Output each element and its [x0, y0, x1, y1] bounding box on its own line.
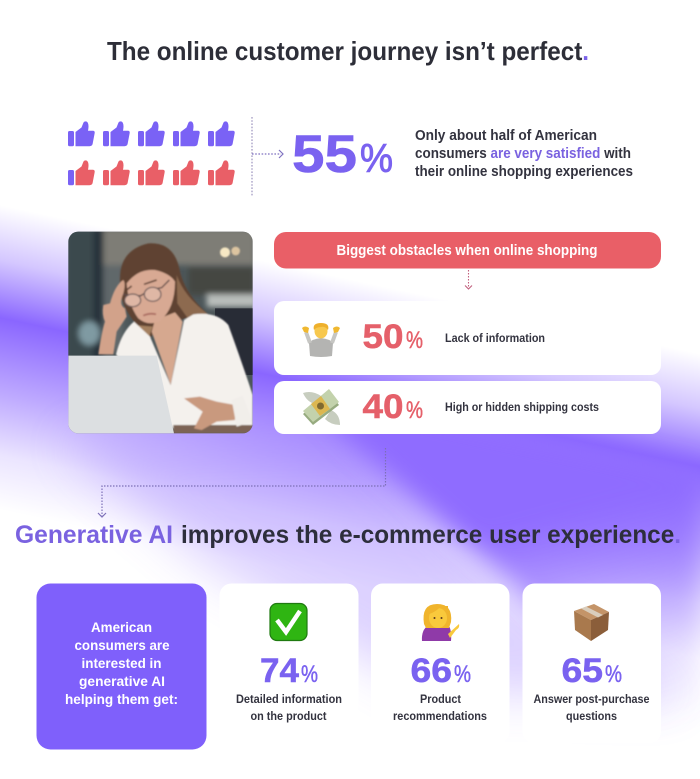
stat: 50%: 50 — [362, 318, 404, 356]
label: detailed information: on the product — [250, 711, 327, 723]
label: product recommendations: Product — [420, 694, 461, 706]
text block: satisfaction: consumers are very satisfied with — [415, 146, 631, 162]
arrow: dotted connector to second heading — [98, 448, 386, 517]
stat: 55% — [292, 125, 393, 184]
stat: 40% — [362, 388, 423, 426]
header: biggest obstacles: Biggest obstacles when online shopping — [336, 242, 598, 259]
stat: 55%: 55 — [292, 125, 357, 184]
stat: 66% — [410, 652, 471, 690]
panel: American consumers: helping them get: — [65, 691, 178, 707]
icon: red thumb 9 — [173, 160, 200, 185]
label: detailed information: Detailed information — [236, 694, 342, 706]
icon: red thumb 10 — [208, 160, 235, 185]
stat: 40%: 40 — [362, 388, 404, 426]
arrow: dotted divider to 55% — [252, 117, 283, 197]
thumbs icon grid — [68, 121, 235, 185]
icon: purple thumb 1 — [68, 121, 95, 146]
text block: satisfaction: Only about half of American — [415, 128, 597, 144]
heading: generative AI: improves the e-commerce user experience. — [181, 521, 681, 549]
card: product recommendations — [371, 584, 510, 744]
stat: 40%: % — [406, 397, 423, 424]
title: The online customer journey isn’t perfect. — [107, 36, 589, 66]
label: product recommendations — [393, 694, 487, 723]
label: post-purchase questions: Answer post-purchase — [534, 694, 650, 706]
photo: frustrated woman at laptop — [65, 228, 257, 433]
card: post-purchase questions — [522, 584, 661, 744]
label: product recommendations: recommendations — [393, 711, 487, 723]
panel: American consumers: consumers are — [74, 637, 170, 653]
panel: American consumers: American — [91, 619, 152, 635]
panel: American consumers — [36, 584, 206, 750]
icon: woman tipping hand — [422, 604, 459, 641]
label: post-purchase questions — [534, 694, 650, 723]
label: post-purchase questions: questions — [566, 711, 617, 723]
stat: 66%: % — [454, 661, 471, 688]
icon: purple thumb 4 — [173, 121, 200, 146]
icon: red thumb 7 — [103, 160, 130, 185]
icon: purple thumb 3 — [138, 121, 165, 146]
icon: person shrugging — [302, 323, 340, 357]
text block: satisfaction: their online shopping experiences — [415, 164, 633, 180]
stat: 50% — [362, 318, 423, 356]
stat: 74%: 74 — [260, 652, 299, 690]
panel: American consumers: generative AI — [79, 673, 165, 689]
background gradient band — [0, 213, 700, 718]
stat: 65%: 65 — [562, 652, 603, 690]
stat: 65%: % — [605, 661, 622, 688]
stat: 66%: 66 — [410, 652, 452, 690]
stat: 50%: % — [406, 327, 423, 354]
header: biggest obstacles — [274, 232, 661, 268]
stat: 74% — [260, 652, 318, 690]
icon: purple thumb 5 — [208, 121, 235, 146]
card: lack of information — [274, 301, 661, 375]
icon: half purple thumb 6 — [68, 160, 95, 185]
panel: American consumers: interested in — [82, 655, 162, 671]
stat: 74%: % — [301, 661, 318, 688]
heading: generative AI: Generative AI — [15, 521, 173, 549]
stat: 55%: % — [360, 137, 393, 181]
card: shipping costs — [274, 381, 661, 434]
icon: green check mark — [270, 604, 307, 640]
arrow: to obstacle cards — [465, 270, 472, 289]
stat: 65% — [562, 652, 622, 690]
icon: money with wings — [303, 389, 340, 425]
icon: cardboard box — [574, 604, 609, 641]
icon: red thumb 8 — [138, 160, 165, 185]
label: detailed information — [236, 694, 342, 723]
text block: satisfaction — [415, 128, 633, 180]
icon: purple thumb 2 — [103, 121, 130, 146]
label: lack of information: Lack of information — [445, 333, 545, 345]
card: detailed information — [220, 584, 358, 744]
label: shipping costs: High or hidden shipping costs — [445, 402, 599, 414]
